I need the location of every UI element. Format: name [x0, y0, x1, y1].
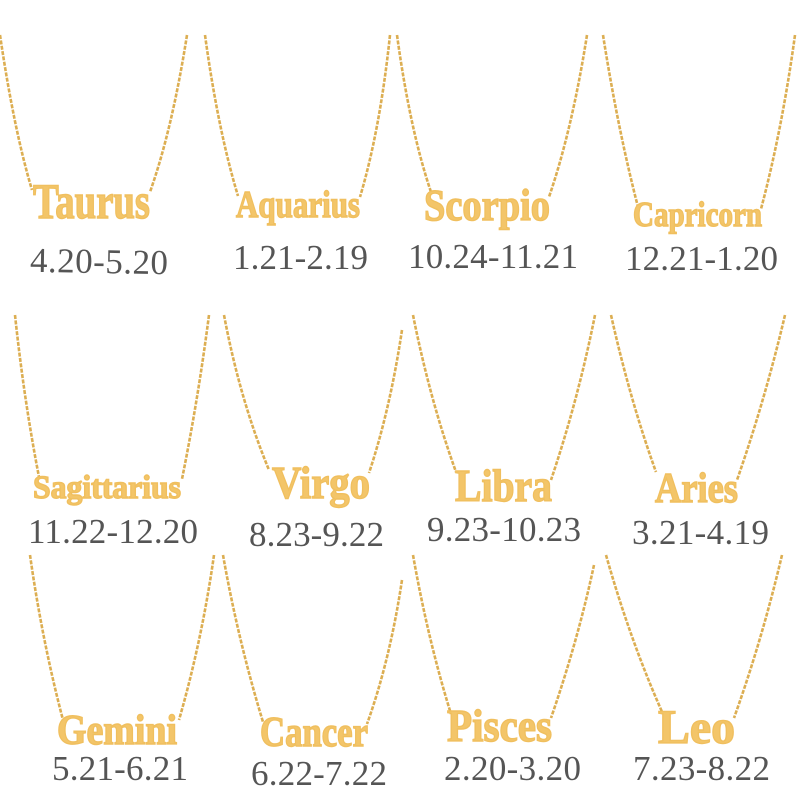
- necklace: Aquarius: [205, 35, 390, 226]
- necklace: Aries: Aries: [655, 466, 738, 512]
- necklace: Libra: [413, 315, 595, 511]
- necklace: Cancer: Cancer: [260, 710, 368, 756]
- necklace: Scorpio: [397, 35, 587, 230]
- date: Gemini: 5.21-6.21: [52, 749, 188, 788]
- necklace: Gemini: Gemini: [57, 708, 177, 754]
- date: Capricorn: 12.21-1.20: [625, 239, 778, 278]
- necklace: Sagittarius: [15, 315, 209, 506]
- date: Aries: 3.21-4.19: [632, 513, 769, 552]
- necklace: Virgo: [224, 315, 402, 508]
- date: Pisces: 2.20-3.20: [444, 749, 581, 788]
- date: Virgo: 8.23-9.22: [249, 515, 384, 554]
- necklace: Scorpio: Scorpio: [424, 181, 550, 230]
- necklace: Virgo: Virgo: [272, 457, 370, 508]
- date: Sagittarius: 11.22-12.20: [28, 512, 198, 551]
- necklace: Aquarius: Aquarius: [236, 184, 360, 226]
- necklace: Sagittarius: Sagittarius: [33, 470, 181, 506]
- necklace: Capricorn: [603, 35, 795, 234]
- necklace: Gemini: [30, 555, 214, 754]
- necklace: Taurus: [0, 35, 187, 229]
- necklace: Aries: [611, 315, 785, 512]
- necklace: Leo: [606, 555, 782, 754]
- necklace: Capricorn: Capricorn: [633, 195, 762, 234]
- necklace: Libra: Libra: [455, 460, 552, 511]
- date: Taurus: 4.20-5.20: [30, 241, 168, 282]
- date: Scorpio: 10.24-11.21: [408, 237, 578, 276]
- necklace: Pisces: [413, 555, 594, 751]
- date: Aquarius: 1.21-2.19: [233, 238, 368, 277]
- necklace: Pisces: Pisces: [447, 700, 552, 751]
- necklace: Leo: Leo: [658, 701, 735, 754]
- date: Leo: 7.23-8.22: [633, 749, 770, 788]
- date: Libra: 9.23-10.23: [427, 510, 581, 549]
- date: Cancer: 6.22-7.22: [251, 754, 387, 793]
- necklace: Taurus: Taurus: [33, 173, 150, 229]
- necklace: Cancer: [223, 555, 402, 756]
